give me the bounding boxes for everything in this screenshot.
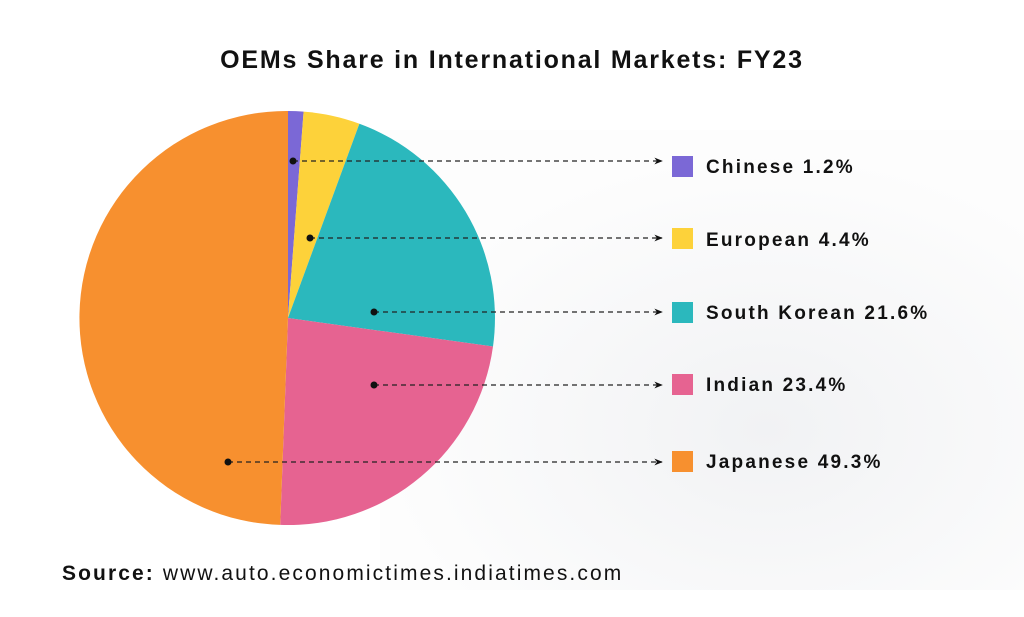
source: Source: www.auto.economictimes.indiatimes.com (62, 562, 623, 585)
legend: Indian 23.4% (706, 375, 848, 396)
legend: Japanese 49.3% (706, 452, 883, 473)
legend: European 4.4% (706, 230, 871, 251)
title: OEMs Share in International Markets: FY23 (220, 46, 804, 74)
legend: Chinese 1.2% (706, 157, 855, 178)
legend: South Korean 21.6% (706, 303, 929, 324)
background image area (380, 130, 1024, 590)
arrows (228, 161, 662, 462)
legend (672, 156, 929, 473)
pie chart (79, 111, 495, 525)
